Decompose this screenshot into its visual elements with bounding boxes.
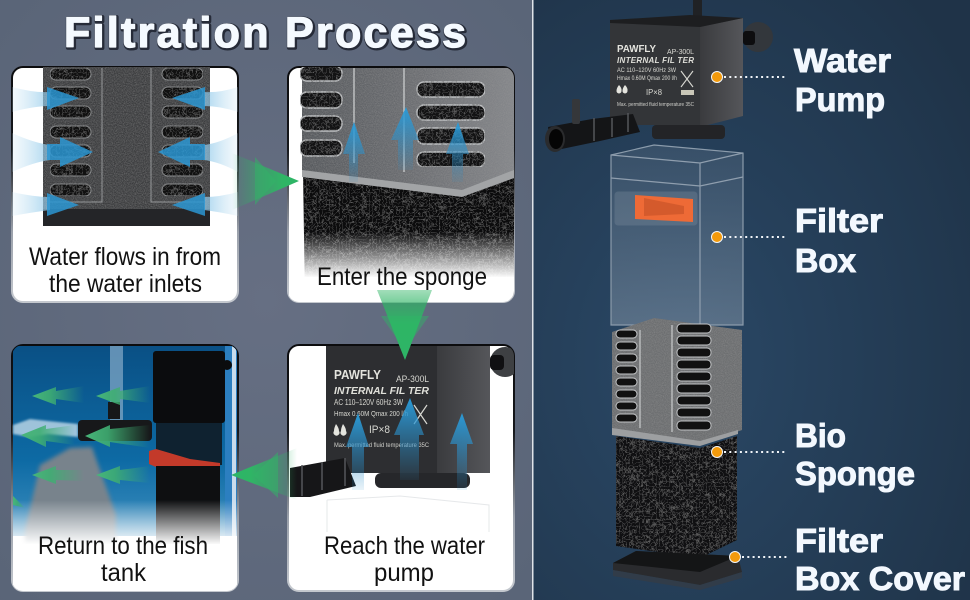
part: filter box cover [613,551,742,590]
pump label text: Hmax 0.60M Qmax 200 l/h [617,76,677,82]
blue upward arrows [346,398,473,490]
caption: step 4: tank [101,559,146,587]
pump label text: Hmax 0.60M Qmax 200 l/h [334,409,408,418]
green flow arrows [13,386,150,508]
pump label text: AP-300L [396,374,429,384]
callout: filter box cover: Filter [795,522,883,559]
panel: step 1 water inlets [12,66,238,302]
panel: step 3 water pump [288,345,520,591]
panel: step 2 enter the sponge [288,66,515,303]
pump label text: Max. permitted fluid temperature 35C [334,442,429,449]
image: aquarium scene [13,346,237,594]
pump label text: AC 110–120V 60Hz 3W [334,398,403,407]
callout: filter box: Filter [795,202,883,239]
caption: step 3 [324,532,485,587]
callout: filter box cover [730,522,965,597]
pump label text: PAWFLY [334,368,382,382]
exploded filter illustration [545,0,773,590]
pump label text: INTERNAL FIL TER [617,56,694,65]
blue upward arrows [343,107,469,182]
part: filter box [611,145,743,325]
title: Filtration Process [64,9,466,57]
caption: step 1: Water flows in from [29,243,221,271]
pump label text: IP×8 [646,87,662,97]
pump label text [334,368,429,449]
caption: step 1: the water inlets [49,270,202,298]
part: bio sponge cage [612,318,742,446]
pump label text: IP×8 [369,424,390,436]
callout: bio sponge: Sponge [795,455,915,492]
image: filter cage front [43,66,210,226]
pump label text: AC 110–120V 60Hz 3W [617,67,676,74]
image: filter cage close-up [300,66,514,197]
arrow: step 1 to step 2 [232,153,299,210]
panel: components background [532,0,970,600]
image: pump body [290,346,520,532]
callout: water pump: Pump [795,81,885,118]
callout: water pump [712,42,891,118]
callout: filter box cover: Box Cover [795,560,965,597]
part: bio sponge [616,436,737,558]
pump label text: AP-300L [667,47,694,56]
arrow: step 2 to step 3 [377,290,432,360]
caption: step 3: pump [374,559,434,587]
caption: step 3: Reach the water [324,532,485,560]
blue flow bands and arrows [12,87,238,216]
caption: step 4: Return to the fish [38,532,208,560]
pump label text [616,44,694,108]
panel: step 4 return to tank [12,345,238,594]
part: water pump [545,0,773,152]
pump label text: INTERNAL FIL TER [334,385,429,397]
callout: filter box [712,202,883,279]
caption: step 1 [29,243,221,298]
arrow: step 3 to step 4 [231,448,297,500]
pump label text: Max. permitted fluid temperature 35C [617,102,694,108]
title: Filtration Process [65,10,467,58]
caption: step 4 [38,532,208,587]
callout: water pump: Water [794,42,891,79]
callout: bio sponge: Bio [795,417,846,454]
image: sponge block [289,170,515,303]
caption: step 2: Enter the sponge [317,263,487,291]
pump label text: PAWFLY [617,44,656,55]
callout: filter box: Box [795,242,857,279]
callout: bio sponge [712,417,915,492]
panel: filtration process background [0,0,532,600]
